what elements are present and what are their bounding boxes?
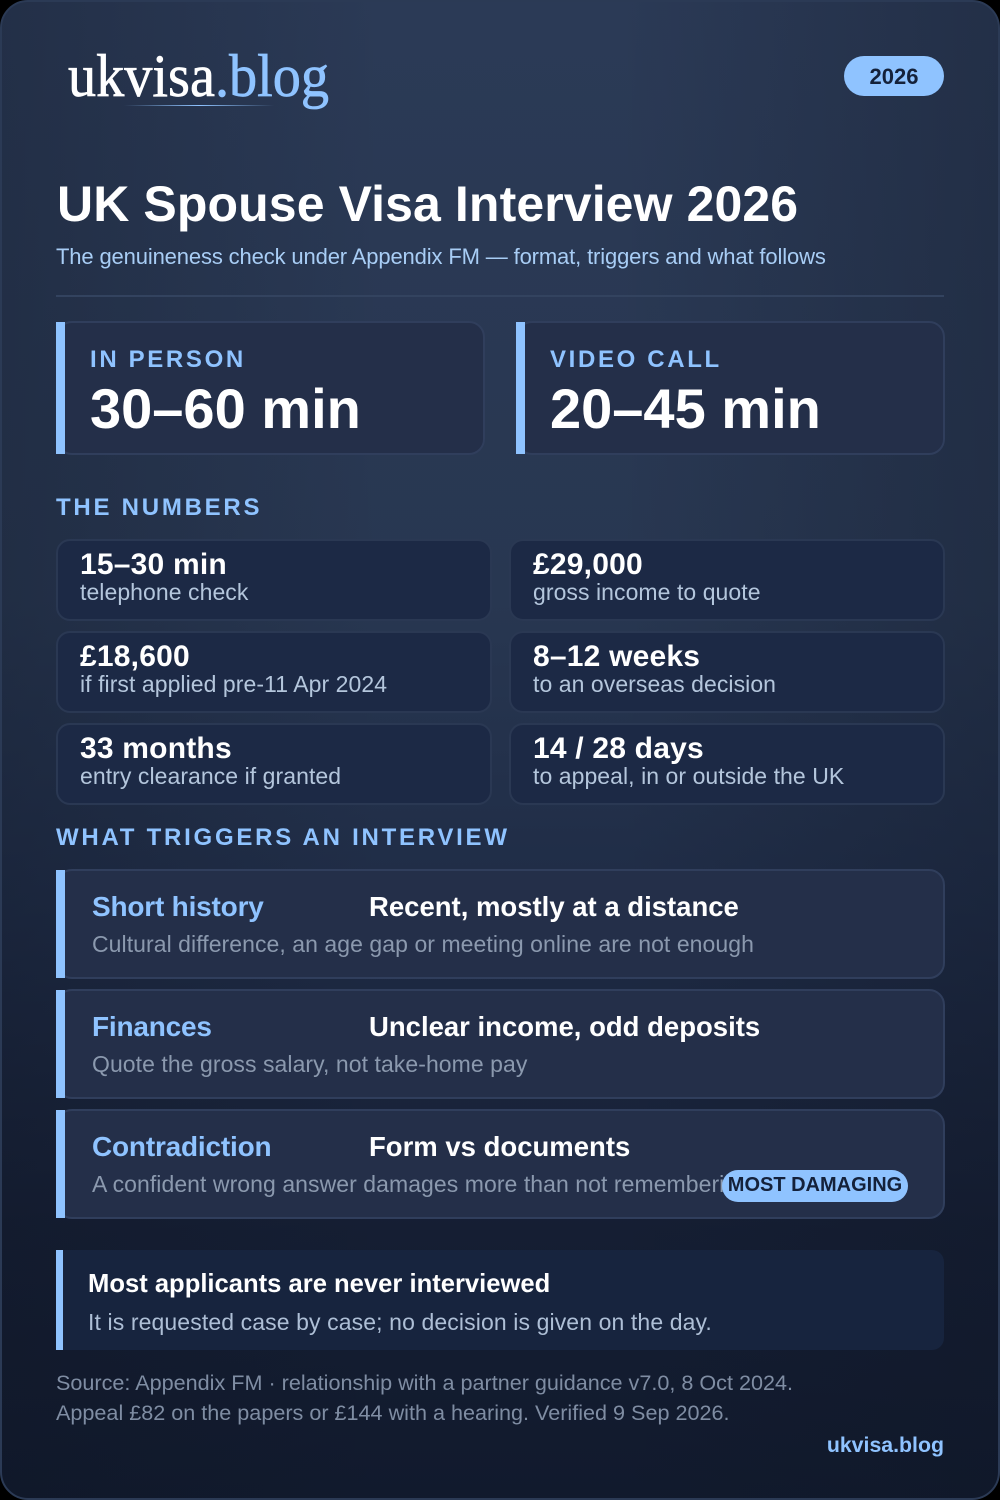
trigger: finances	[56, 989, 945, 1099]
source note: Appeal £82 on the papers or £144 with a hearing. Verified 9 Sep 2026.	[56, 1400, 730, 1425]
trigger: short history: Short history	[92, 891, 264, 922]
badge: most damaging	[722, 1170, 908, 1202]
year badge: 2026	[870, 64, 918, 89]
label: video call: VIDEO CALL	[550, 346, 722, 373]
trigger: finances: Quote the gross salary, not take-home pay	[92, 1051, 527, 1077]
source note: Source: Appendix FM · relationship with a partner guidance v7.0, 8 Oct 2024.	[56, 1370, 793, 1395]
label: in person: IN PERSON	[90, 346, 246, 373]
number: appeal window	[509, 723, 945, 805]
number: pre-2024 threshold: if first applied pre-11 Apr 2024	[80, 671, 387, 697]
trigger: short history	[56, 869, 945, 979]
heading: what triggers an interview: WHAT TRIGGERS AN INTERVIEW	[56, 824, 510, 851]
badge: most damaging: MOST DAMAGING	[728, 1174, 902, 1196]
value: in person: 30–60 min	[90, 377, 361, 440]
trigger: short history: Cultural difference, an age gap or meeting online are not enough	[92, 931, 754, 957]
callout: most applicants never interviewed	[56, 1250, 944, 1350]
callout: most applicants never interviewed: It is requested case by case; no decision is given on the day.	[88, 1309, 712, 1335]
trigger: contradiction: Form vs documents	[369, 1131, 630, 1162]
callout: most applicants never interviewed: Most applicants are never interviewed	[88, 1270, 550, 1298]
logo: ukvisa.blog: ukvisa.blog	[68, 43, 329, 109]
number: gross income: £29,000	[533, 548, 643, 581]
number: telephone check	[56, 539, 492, 621]
value: video call: 20–45 min	[550, 377, 821, 440]
heading: the numbers: THE NUMBERS	[56, 494, 262, 521]
number: gross income: gross income to quote	[533, 579, 761, 605]
number: telephone check: 15–30 min	[80, 548, 227, 581]
number: entry clearance: 33 months	[80, 732, 232, 765]
stat card: in person	[56, 321, 485, 455]
trigger: contradiction: A confident wrong answer damages more than not remembering	[92, 1171, 750, 1197]
number: entry clearance: entry clearance if granted	[80, 763, 341, 789]
trigger: contradiction	[56, 1109, 945, 1219]
number: entry clearance	[56, 723, 492, 805]
trigger: short history: Recent, mostly at a distance	[369, 891, 739, 922]
number: appeal window: to appeal, in or outside the UK	[533, 763, 844, 789]
trigger: contradiction: Contradiction	[92, 1131, 271, 1162]
site credit: ukvisa.blog	[827, 1433, 944, 1457]
number: pre-2024 threshold	[56, 631, 492, 713]
number: decision time	[509, 631, 945, 713]
number: appeal window: 14 / 28 days	[533, 732, 704, 765]
title: UK Spouse Visa Interview 2026	[57, 176, 798, 232]
number: decision time: to an overseas decision	[533, 671, 776, 697]
source note	[56, 1370, 793, 1425]
stat card: video call	[516, 321, 945, 455]
number: pre-2024 threshold: £18,600	[80, 640, 190, 673]
number: telephone check: telephone check	[80, 579, 248, 605]
subtitle: The genuineness check under Appendix FM — format, triggers and what follows	[56, 244, 826, 269]
number: decision time: 8–12 weeks	[533, 640, 700, 673]
number: gross income	[509, 539, 945, 621]
trigger: finances: Unclear income, odd deposits	[369, 1011, 760, 1042]
logo underline	[124, 105, 274, 106]
trigger: finances: Finances	[92, 1011, 212, 1042]
year badge	[844, 56, 944, 96]
